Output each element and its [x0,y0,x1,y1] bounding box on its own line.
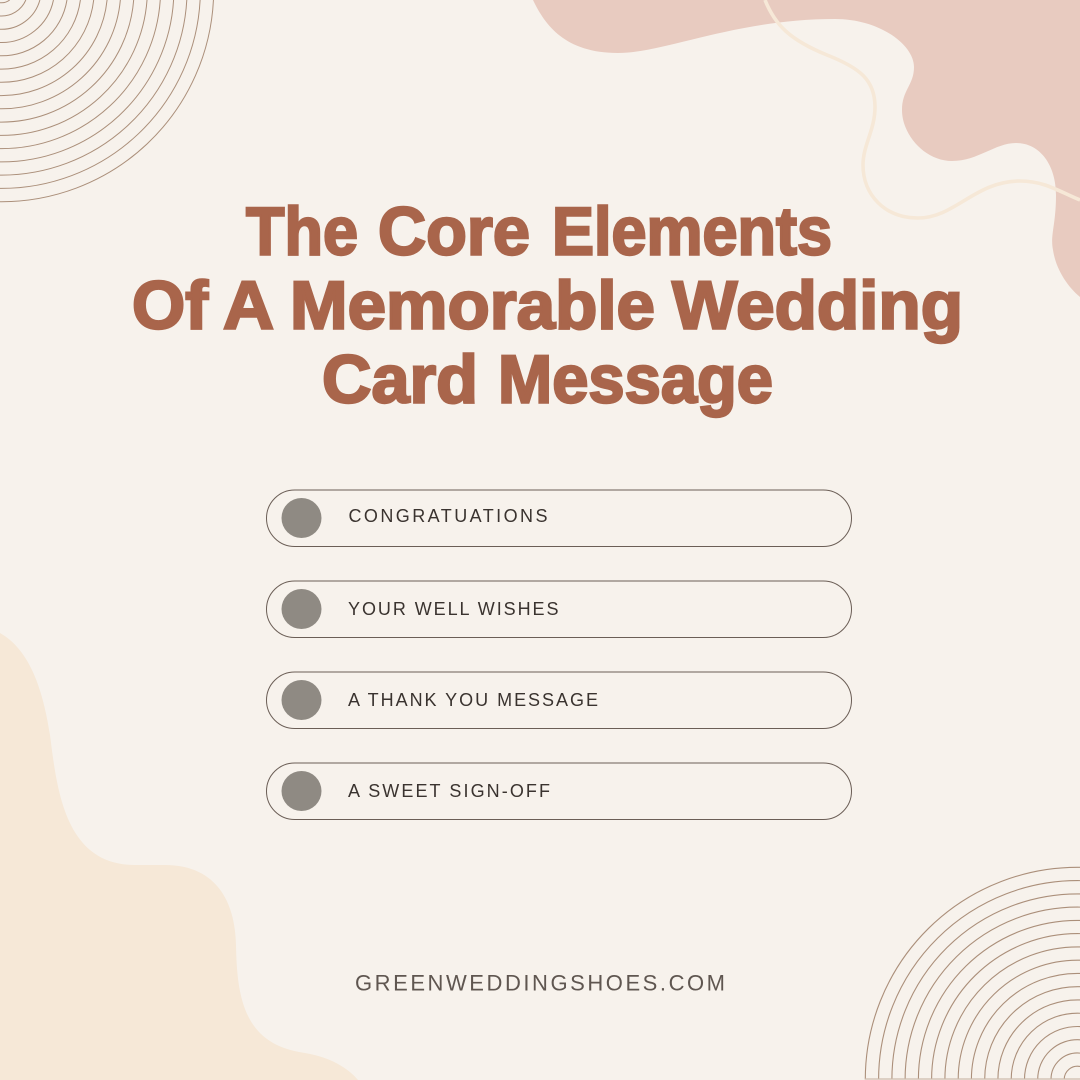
list item: a sweet sign-off: A SWEET SIGN-OFF [348,781,550,801]
title [132,194,963,418]
list item: a thank you message: A THANK YOU MESSAGE [348,690,598,710]
title: Memorable [290,268,655,344]
cream wavy line [765,0,1080,218]
list item: a thank you message [266,672,852,728]
cream blob bottom left [0,633,358,1080]
title: Message [498,342,773,418]
list item: a sweet sign-off [266,763,852,820]
concentric rings bottom right [865,867,1080,1080]
list item: your well wishes: YOUR WELL WISHES [348,599,558,619]
title: Elements [552,194,832,270]
list item: congratulations [266,490,852,546]
title: The [246,194,358,270]
title: Wedding [672,268,963,344]
pink blob top right [533,0,1080,297]
title: Card [322,342,478,418]
title: Core [378,194,530,270]
list item: your well wishes [266,581,852,638]
list item: congratulations: CONGRATUATIONS [348,506,548,526]
footer website: GREENWEDDINGSHOES.COM [355,970,725,996]
title: A [223,268,274,344]
title: Of [132,268,208,344]
concentric rings top left [0,0,213,202]
